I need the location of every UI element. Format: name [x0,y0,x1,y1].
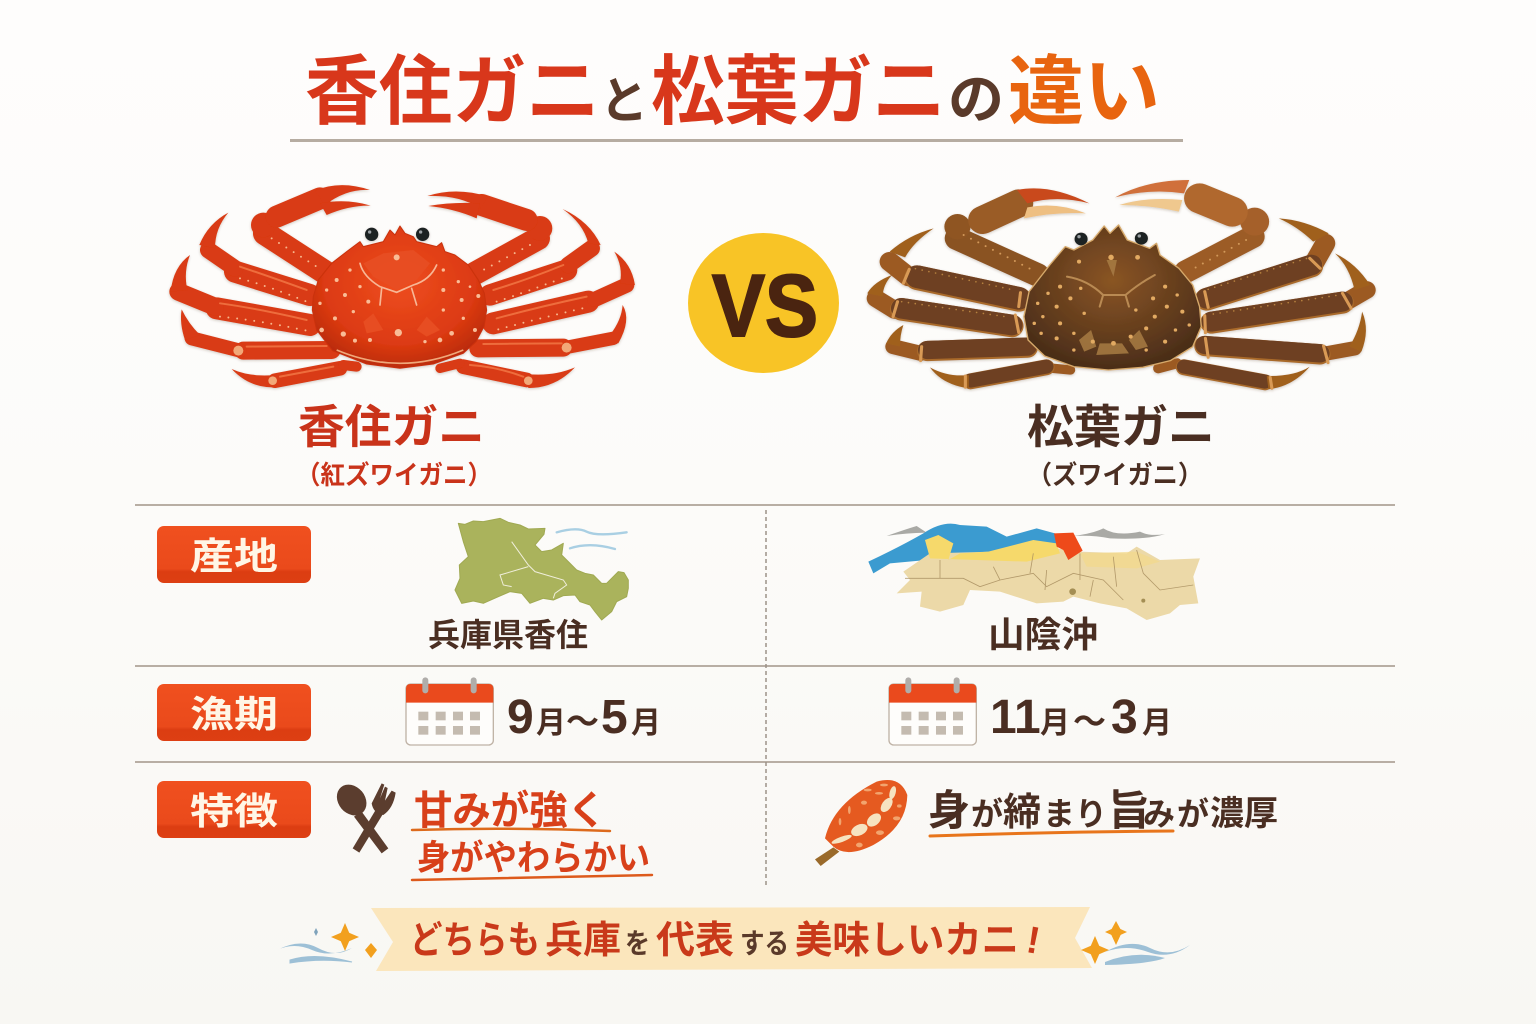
badge: VS: VS [712,256,818,355]
banner: closing message: 兵庫 [545,909,621,964]
banner: closing message: 代表 [656,909,734,964]
text: Matsuba season: 3 [1111,691,1138,744]
text: Matsuba characteristics: 旨 [1108,777,1150,838]
label: San'in offshore: 山陰沖 [988,606,1098,658]
text: Matsuba characteristics: 濃厚 [1210,786,1278,835]
title: の [948,55,1004,134]
text: Matsuba season: 月 [1142,698,1172,742]
banner: closing message [371,907,1092,971]
title [305,30,1160,140]
icon: spoon and fork [331,779,396,853]
text: Kasumi characteristics: 身がやわらかい [417,830,650,881]
text: Matsuba characteristics: 身 [928,777,970,838]
text: Kasumi season: 5 [601,691,628,744]
text: Kasumi characteristics: 甘みが強く [414,778,606,836]
text: Matsuba season: 11 [990,691,1041,744]
banner: closing message: 美味しいカニ [795,909,1019,964]
text: Matsuba characteristics: 締 [1003,781,1041,836]
heading: Kasumi crab name [296,391,492,492]
icon: calendar (Kasumi) [406,677,493,745]
banner: closing message: ! [1023,919,1043,963]
carapace [312,226,487,368]
text: Matsuba season: 〜 [1073,695,1106,743]
tag: characteristics [157,781,311,838]
left claw [251,185,371,273]
badge: VS [688,233,839,373]
heading: Matsuba crab name [1027,391,1215,492]
heading: Matsuba crab name: （ズワイガニ） [1027,455,1203,492]
left claw [944,188,1089,275]
text: Matsuba characteristics: まり [1043,789,1107,835]
text: Kasumi season: 9 [507,691,534,744]
text: Matsuba season: 月 [1040,698,1070,742]
title: 違い [1008,30,1160,140]
tag: characteristics: 特徴 [190,781,278,835]
title: と [600,61,648,133]
text: Kasumi season: 月 [536,698,566,742]
text: Kasumi season: 月 [631,698,661,742]
heading: Kasumi crab name: 香住ガニ [298,391,485,457]
tag: fishing season [157,684,311,741]
text: Matsuba characteristics: み [1143,789,1175,835]
text: Matsuba characteristics: が [1177,789,1209,835]
carapace [1024,225,1201,370]
text: Kasumi season: 〜 [566,695,599,743]
heading: Kasumi crab name: （紅ズワイガニ） [296,455,492,492]
title: 香住ガニ [305,30,600,140]
illustration: brown snow crab (Matsuba) [867,180,1370,389]
text: Kasumi characteristics [412,778,652,881]
label: Hyogo Kasumi: 兵庫県香住 [428,610,588,656]
banner: closing message: を [625,922,650,962]
icon: calendar (Matsuba) [889,677,976,745]
right claw [427,191,552,273]
map: Kasumi, Hyogo [455,518,628,620]
illustration: red snow crab (Kasumi) [171,185,635,388]
heading: Matsuba crab name: 松葉ガニ [1027,391,1215,457]
decoration: left waves and sparkles [277,923,377,963]
tag: origin [157,526,311,583]
tag: origin: 産地 [190,526,278,580]
banner: closing message: どちらも [410,909,540,964]
title: 松葉ガニ [651,30,946,140]
icon: crab meat in shell [815,780,907,866]
text: Matsuba characteristics: が [971,789,1003,835]
decoration: right waves and sparkles [1081,921,1190,965]
map: San'in offshore [868,524,1200,620]
text: Matsuba characteristics [928,777,1278,838]
banner: closing message: する [740,922,789,962]
right claw [1115,180,1269,272]
tag: fishing season: 漁期 [190,684,278,738]
